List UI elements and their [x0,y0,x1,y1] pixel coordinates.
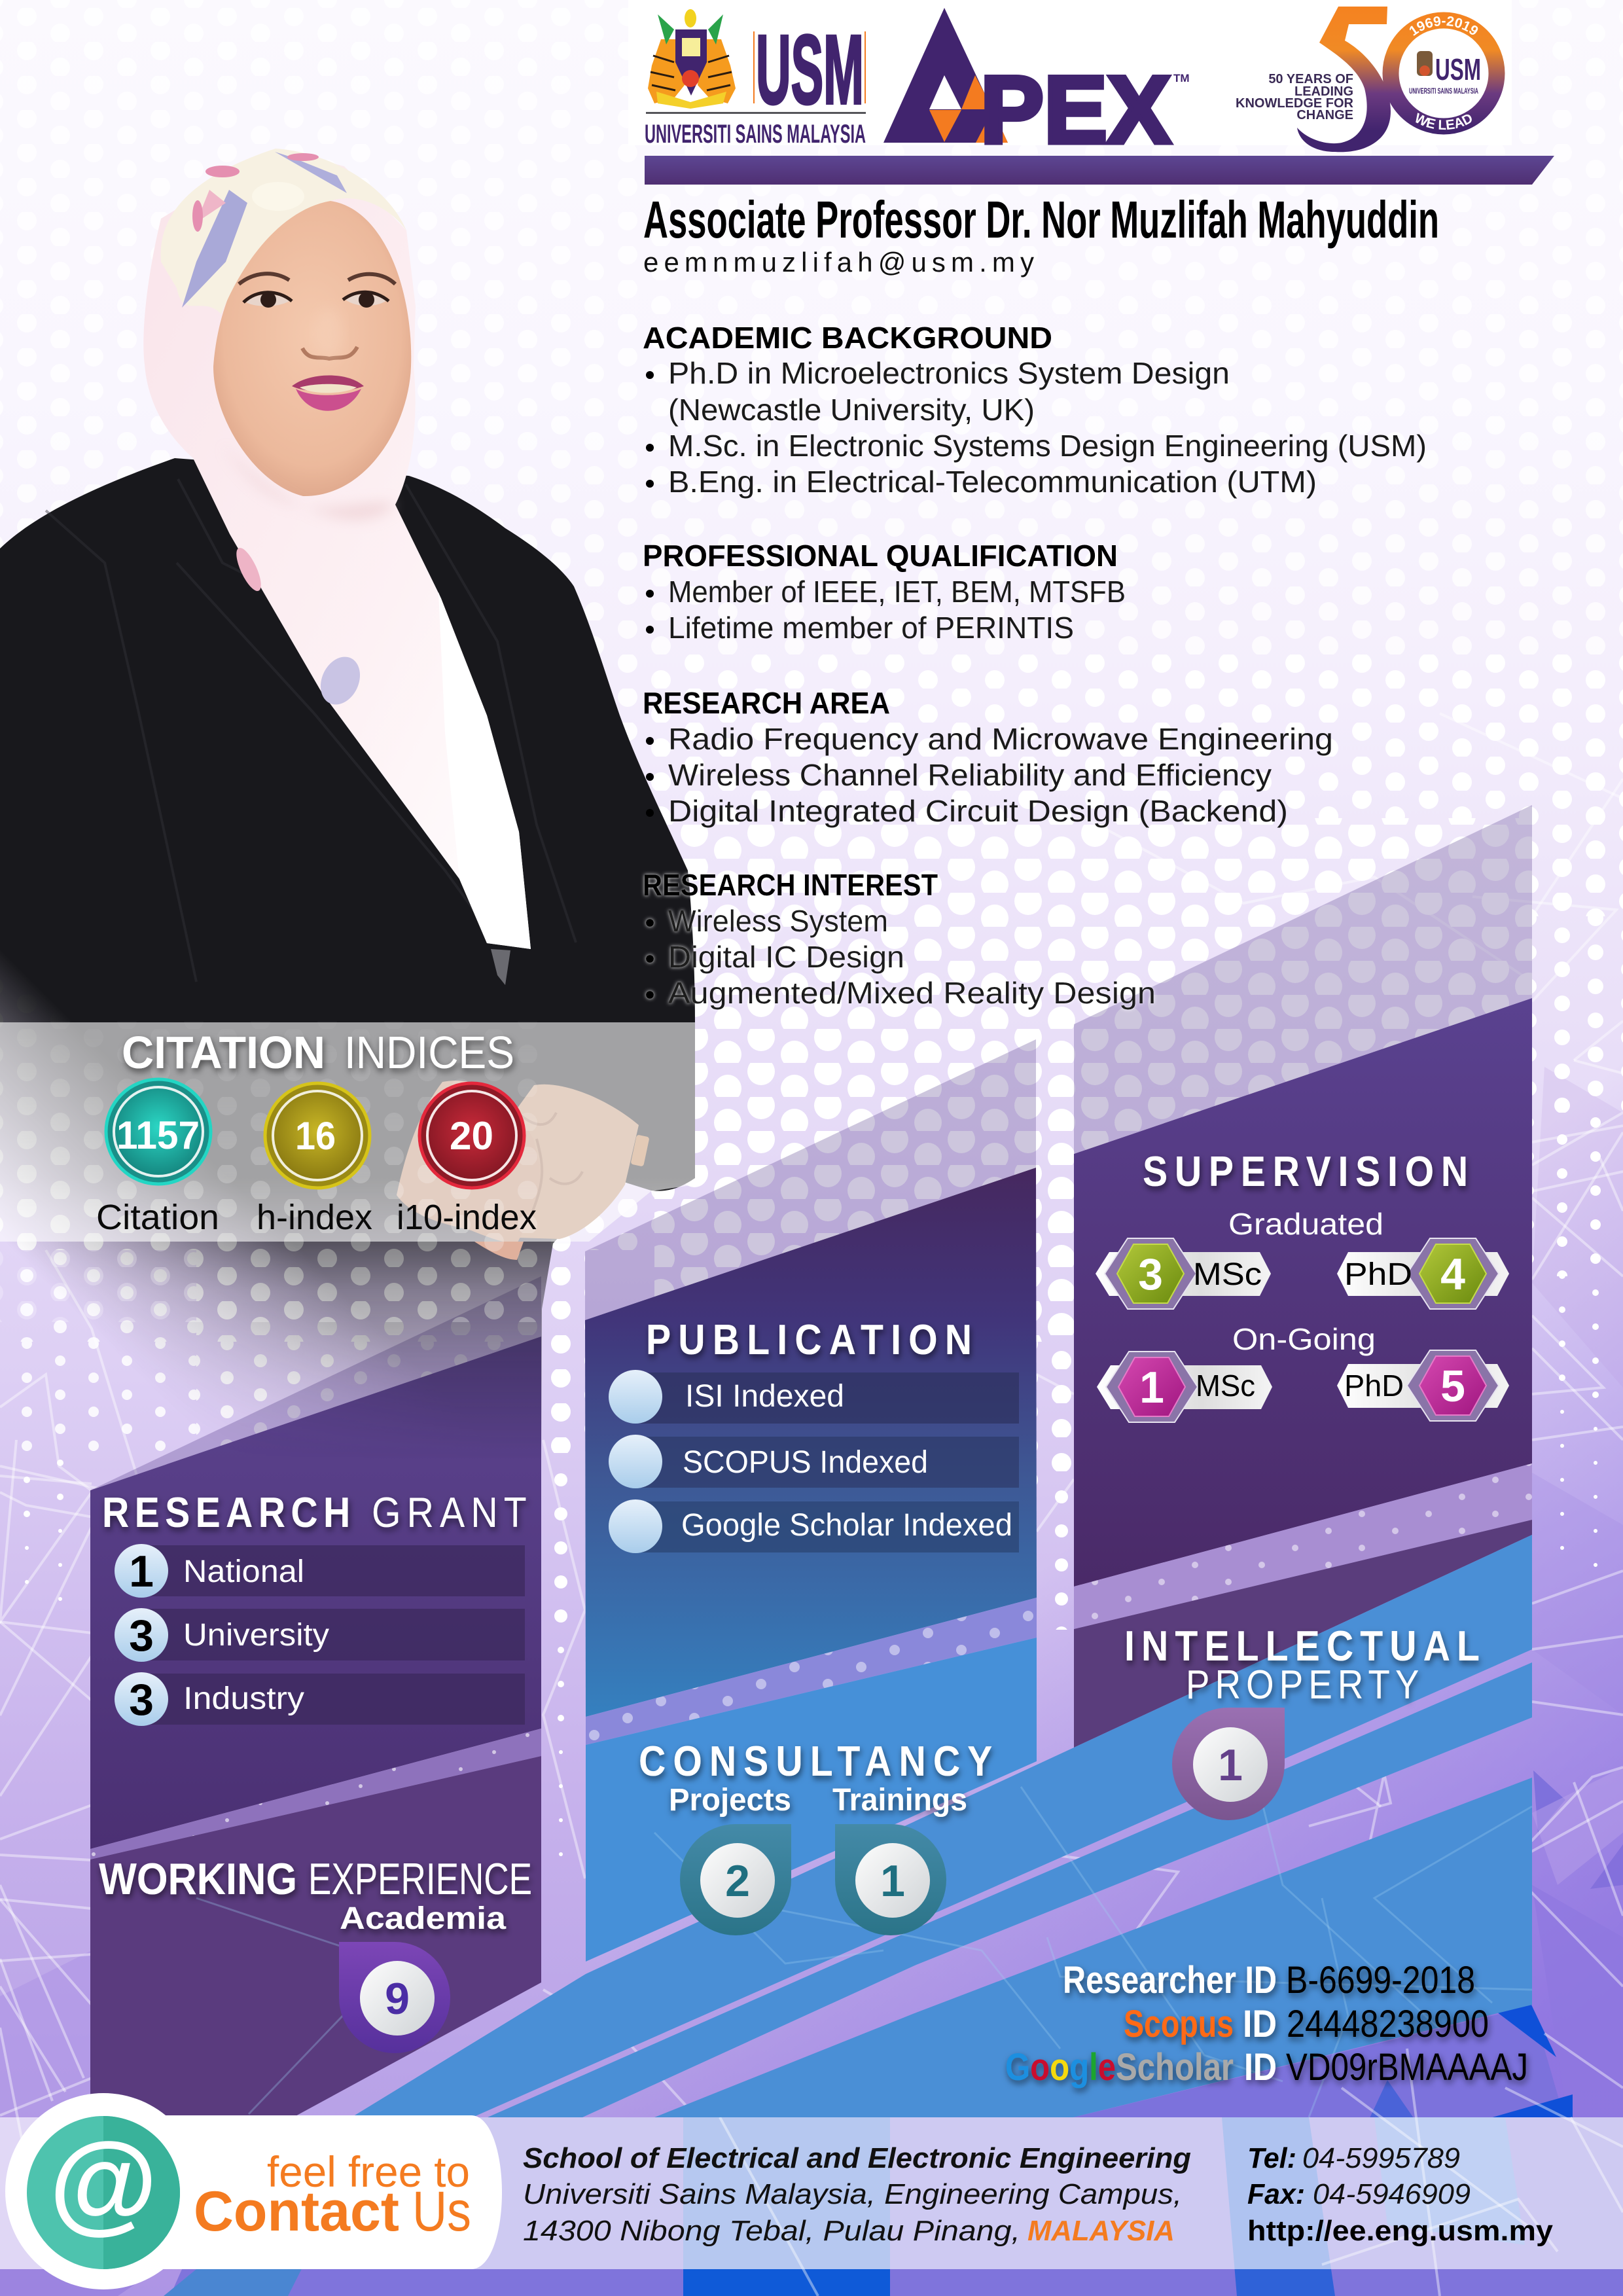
panel: research grant [90,1336,541,1849]
badge: citation [106,1079,211,1184]
contact details [1247,2142,1554,2247]
hijab floral cap [161,149,406,314]
panel: working experience background [90,1756,541,2117]
label: graduated: Graduated [1228,1207,1383,1241]
gap band: supervision to intellectual property [1074,1463,1532,1629]
faint lines over bands [196,1728,1532,2117]
google scholar id: GoogleScholar [1005,2046,1234,2089]
section: professional qualification [643,539,1126,645]
section: academic background: Ph.D in Microelectronics System Design [668,356,1230,390]
row: industry: Industry [183,1681,304,1716]
consultancy content [639,1738,992,1935]
scopus id: Scopus [1124,2003,1234,2045]
heading: INDICES [344,1027,514,1078]
scopus id [1124,2003,1489,2045]
section: professional qualification: PROFESSIONAL QUALIFICATION [643,539,1118,573]
logo: APEX: TM [1173,72,1190,84]
row: industry [115,1672,525,1726]
row: national [115,1544,525,1598]
logo: USM wordmark: USM [756,14,864,124]
blue diagonal bands [351,1535,1532,2117]
badge: 1: 1 [1218,1740,1243,1790]
dots over faded photo [0,1077,537,1322]
section: research interest: Digital IC Design [668,940,904,974]
badge: PhD graduated: 4 [1440,1249,1465,1299]
panel: publication translucent top [585,1039,1036,1320]
row: Google Scholar: Google Scholar Indexed [681,1508,1012,1543]
badge: MSc on-going: 1 [1139,1363,1164,1412]
hands [397,1081,639,1260]
section: research area [643,686,1333,828]
polygon shard background [0,1067,1623,2296]
header bar [645,156,1554,185]
citation band [0,1022,695,1242]
portrait photo [0,149,695,1473]
contact details: Tel: [1247,2142,1296,2174]
badge: i10-index: 20 [450,1114,493,1158]
contact details: 04-5946909 [1313,2178,1471,2210]
badge: projects: 2 [725,1856,750,1906]
researcher id: B-6699-2018 [1286,1959,1475,2001]
row: Google Scholar [609,1499,1019,1553]
badge: projects [680,1824,791,1935]
badge: MSc graduated [1096,1238,1271,1309]
gap band: publication to consultancy [586,1598,1037,1745]
logo: 50 years: USM [1435,52,1481,86]
section: research interest: Augmented/Mixed Reality Design [668,976,1156,1010]
logo: 50 years: CHANGE [1296,108,1353,122]
badge: PhD on-going: 5 [1440,1361,1465,1411]
hijab shade [223,445,395,520]
logo: APEX [883,8,1190,163]
section: research area: Radio Frequency and Microwave Engineering [668,722,1333,756]
jacket [0,458,695,1473]
badge: h-index [265,1083,370,1188]
heading [99,1854,532,1904]
white pill [5,2093,502,2289]
section: professional qualification: Member of IEEE, IET, BEM, MTSFB [668,575,1126,609]
logo: USM wordmark [645,14,866,149]
floral petals [182,152,367,711]
heading [102,1489,527,1536]
badge: PhD on-going: PhD [1344,1369,1404,1403]
section: professional qualification: Lifetime member of PERINTIS [668,611,1074,645]
citation indices [96,1027,537,1237]
section: academic background: ACADEMIC BACKGROUND [643,321,1052,355]
heading [122,1027,514,1078]
address: Universiti Sains Malaysia, Engineering Campus, [523,2178,1182,2210]
labels [96,1198,537,1237]
face [213,201,411,496]
address [523,2142,1191,2247]
row: SCOPUS: SCOPUS Indexed [683,1445,928,1480]
heading: GRANT [372,1489,527,1536]
panel: supervision [1074,998,1532,1587]
contact block [5,2093,502,2289]
label: on-going: On-Going [1232,1322,1376,1356]
heading: SUPERVISION [1143,1148,1468,1195]
header logos [645,7,1505,163]
working experience content [99,1854,532,2053]
badge: MSc graduated: MSc [1193,1257,1262,1292]
logo: 50 years [1236,7,1505,152]
badge: PhD on-going [1337,1350,1509,1421]
mouth [292,375,364,411]
white line network [0,707,1623,2296]
row: university [115,1608,525,1662]
logo: 50 years: 50 YEARS OF [1268,72,1353,86]
labels: h-index [257,1198,372,1237]
white logo backing [628,0,1512,145]
contact band [0,2117,1623,2269]
address: 14300 Nibong Tebal, Pulau Pinang, [523,2215,1020,2247]
feel free to: feel free to [267,2147,470,2196]
badge: trainings [835,1824,946,1935]
panel: consultancy background [586,1638,1037,1962]
icon: at sign: @ [49,2120,158,2244]
google scholar id [1005,2046,1528,2089]
google scholar id: ID [1244,2046,1277,2089]
icon: at sign [27,2116,180,2269]
row: ISI: ISI Indexed [685,1379,844,1414]
contact details: http://ee.eng.usm.my [1247,2215,1554,2247]
contact us: Us [412,2180,471,2243]
heading: CITATION [122,1027,325,1078]
panel: publication [585,1168,1037,1717]
section: academic background [643,321,1427,499]
heading: INTELLECTUAL [1124,1623,1480,1670]
section: research area: RESEARCH AREA [643,686,890,720]
row: university: 3 [129,1611,154,1660]
researcher id: Researcher ID [1063,1959,1277,2001]
bracelet [630,1134,650,1167]
badge: trainings: 1 [880,1856,905,1906]
row: university: University [183,1618,329,1653]
panel: supervision translucent top [1074,805,1532,1154]
row: ISI [609,1370,1019,1424]
badge: MSc on-going: MSc [1196,1369,1255,1403]
researcher IDs [1005,1959,1528,2089]
section: research interest: Wireless System [668,904,888,938]
intellectual property content [1124,1623,1480,1820]
scopus id: ID [1243,2003,1277,2045]
badge: i10-index [419,1083,524,1188]
eyes and brows [239,274,395,360]
google scholar id: VD09rBMAAAAJ [1286,2046,1528,2089]
label: academia: Academia [340,1901,506,1936]
badge: PhD graduated: PhD [1344,1257,1412,1292]
heading: EXPERIENCE [308,1854,532,1904]
labels: Projects [669,1783,791,1818]
logo: 50 years: WE LEAD [1416,113,1472,130]
badge: 9 [339,1942,450,2053]
lower right background tint [0,982,1623,2296]
hijab lower [143,149,531,949]
badge: citation: 1157 [116,1113,200,1157]
section: research area: Wireless Channel Reliability and Efficiency [668,758,1272,792]
email: eemnmuzlifah@usm.my [643,247,1034,278]
badge: 9: 9 [385,1974,410,2024]
address: School of Electrical and Electronic Engineering [523,2142,1191,2174]
logo: USM wordmark: UNIVERSITI SAINS MALAYSIA [645,120,866,149]
logo: USM crest [648,9,736,109]
heading: RESEARCH [102,1489,350,1536]
logo: 50 years: LEADING [1294,84,1353,99]
heading: PUBLICATION [646,1316,972,1363]
panel: research grant translucent top [90,1276,541,1490]
section: research area: Digital Integrated Circuit Design (Backend) [668,794,1288,828]
labels: i10-index [397,1198,537,1237]
jacket folds [46,479,576,982]
address: MALAYSIA [1027,2215,1175,2247]
heading: WORKING [99,1854,297,1904]
hijab fold white [438,592,531,949]
badge: MSc graduated: 3 [1138,1249,1163,1299]
badge: 1 [1172,1708,1285,1820]
labels: Trainings [832,1783,967,1818]
contact us: Contact [194,2180,399,2243]
row: SCOPUS [609,1435,1019,1488]
logo: 50 years: KNOWLEDGE FOR [1236,96,1354,111]
section: academic background: B.Eng. in Electrical-Telecommunication (UTM) [668,465,1317,499]
section: research interest: RESEARCH INTEREST [643,868,938,902]
labels [669,1783,967,1818]
research grant content [102,1489,527,1726]
logo: APEX: PEX [980,56,1171,163]
publication content [609,1316,1019,1553]
collar stripe [491,949,510,985]
section: research interest [643,868,1156,1010]
panel: intellectual property background [1074,1520,1532,1748]
labels: Citation [96,1198,219,1237]
contact details: Fax: [1247,2178,1305,2210]
logo: 50 years: 1969-2019 [1410,16,1478,36]
row: national: National [183,1554,304,1589]
logo: 50 years: UNIVERSITI SAINS MALAYSIA [1409,86,1478,96]
contact details: 04-5995789 [1302,2142,1460,2174]
heading: CONSULTANCY [639,1738,992,1785]
section: academic background: M.Sc. in Electronic Systems Design Engineering (USM) [668,429,1427,463]
researcher id [1063,1959,1475,2001]
row: industry: 3 [129,1675,154,1725]
badge: PhD graduated [1337,1238,1509,1309]
scopus id: 24448238900 [1287,2003,1489,2045]
gap band: research grant to working experience [90,1729,541,1859]
badge: h-index: 16 [295,1114,336,1158]
supervision content [1096,1148,1509,1422]
subheading: PROPERTY [1186,1662,1419,1708]
section: academic background: (Newcastle University, UK) [668,393,1035,427]
badge: MSc on-going [1097,1352,1272,1422]
row: national: 1 [129,1547,154,1596]
